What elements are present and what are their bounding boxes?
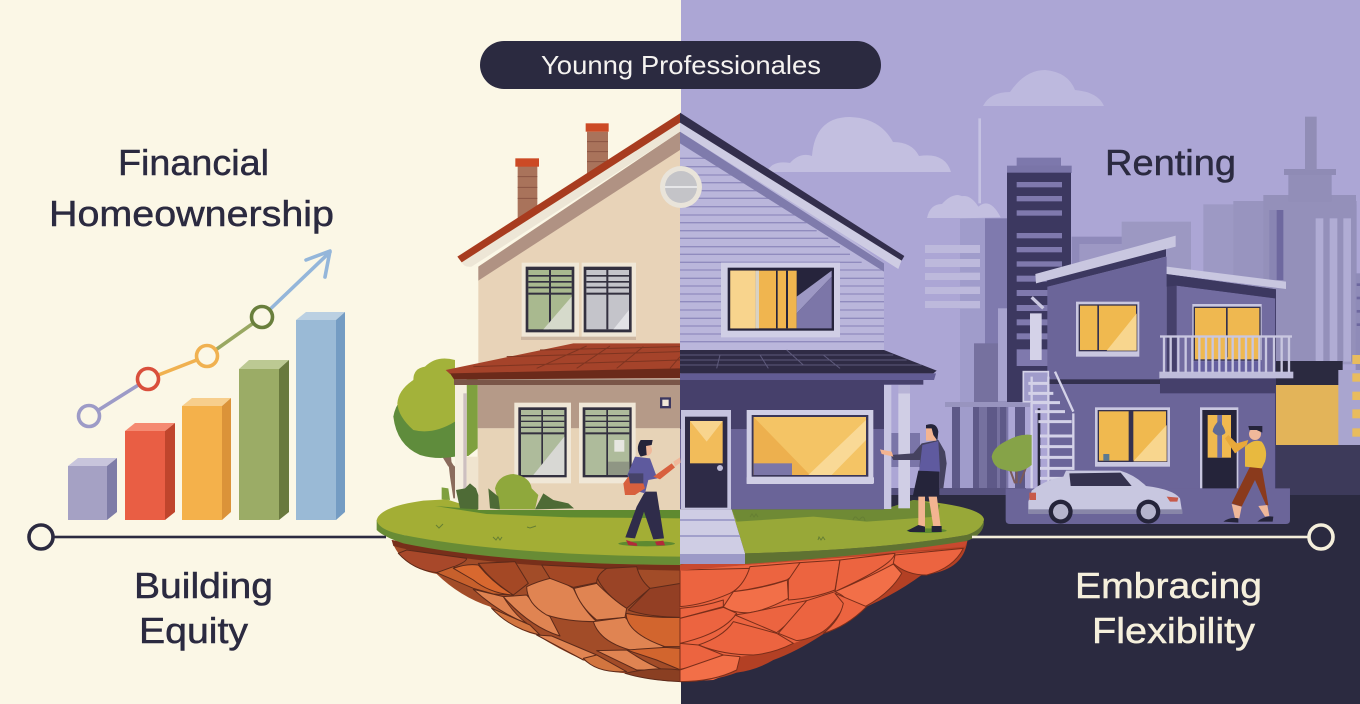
main house: right half, rented: [680, 113, 937, 564]
rental walls: [1047, 257, 1276, 490]
left rock: [392, 540, 681, 682]
person with key: [1213, 420, 1273, 523]
bar 4: [239, 360, 289, 520]
porch pillar: [455, 385, 478, 500]
door: [681, 410, 731, 509]
fence behind right house: [891, 402, 1030, 495]
caption: Building Equity: Building: [134, 565, 273, 606]
heading: Financial Homeownership: Financial: [118, 142, 269, 183]
rental house on the right: [992, 236, 1293, 524]
rental windows: [1076, 302, 1262, 467]
timeline left: [29, 525, 386, 549]
trend line: [78, 251, 330, 426]
platform pavement: [1006, 488, 1290, 524]
caption: Embracing Flexibility: [1075, 565, 1262, 651]
clouds: [767, 70, 1104, 218]
balcony: [1159, 335, 1293, 378]
left lawn: [377, 499, 681, 565]
bar 5: [296, 312, 345, 520]
neighbouring yellow block: [1275, 355, 1360, 495]
front steps: [680, 509, 745, 564]
lower left windows: [514, 397, 671, 483]
heading: Financial Homeownership: [49, 142, 334, 234]
caption: Embracing Flexibility: Embracing: [1075, 565, 1262, 606]
growth bar chart: [68, 251, 345, 520]
rental door: [1200, 407, 1238, 489]
dark tower: [1007, 158, 1072, 403]
city skyline: [960, 117, 1360, 495]
porch pillars: [884, 385, 910, 509]
porch roof left: [446, 343, 680, 385]
heading: Financial Homeownership: Homeownership: [49, 193, 334, 234]
caption: Building Equity: Equity: [139, 610, 248, 651]
bar 2: [125, 423, 175, 520]
heading: Renting: Renting: [1105, 142, 1236, 183]
large lower window: [747, 410, 874, 484]
floating island: [377, 499, 984, 682]
grass tufts: [436, 514, 865, 540]
round vent: [660, 166, 702, 208]
caption: Embracing Flexibility: Flexibility: [1092, 610, 1255, 651]
small tree: [992, 435, 1032, 483]
right lawn: [732, 500, 984, 564]
cream upper wall: [457, 113, 680, 363]
upper right window: [721, 263, 840, 337]
background blinds building: [925, 245, 980, 308]
chimneys: [515, 123, 609, 218]
rental roofs: [1035, 236, 1286, 298]
tree left: [393, 359, 478, 498]
bushes: [442, 474, 574, 509]
title pill: [480, 41, 881, 89]
caption: Building Equity: [134, 565, 273, 651]
person walking on left lawn: [618, 440, 681, 546]
fire escape staircase: [1023, 297, 1073, 488]
upper left windows: [521, 263, 636, 340]
timeline right: [972, 525, 1333, 549]
person standing on right lawn: [880, 424, 947, 533]
bar 1: [68, 458, 117, 520]
car: [1028, 471, 1182, 524]
lower right wall: [680, 380, 884, 509]
title pill: Younng Professionales: [541, 50, 821, 80]
right rock: [680, 541, 967, 682]
porch roof right: [680, 350, 937, 393]
siding wall: [680, 113, 904, 350]
bar 3: [182, 398, 231, 520]
lower left wall: [478, 383, 681, 510]
main house: left half, owned: [393, 113, 681, 510]
